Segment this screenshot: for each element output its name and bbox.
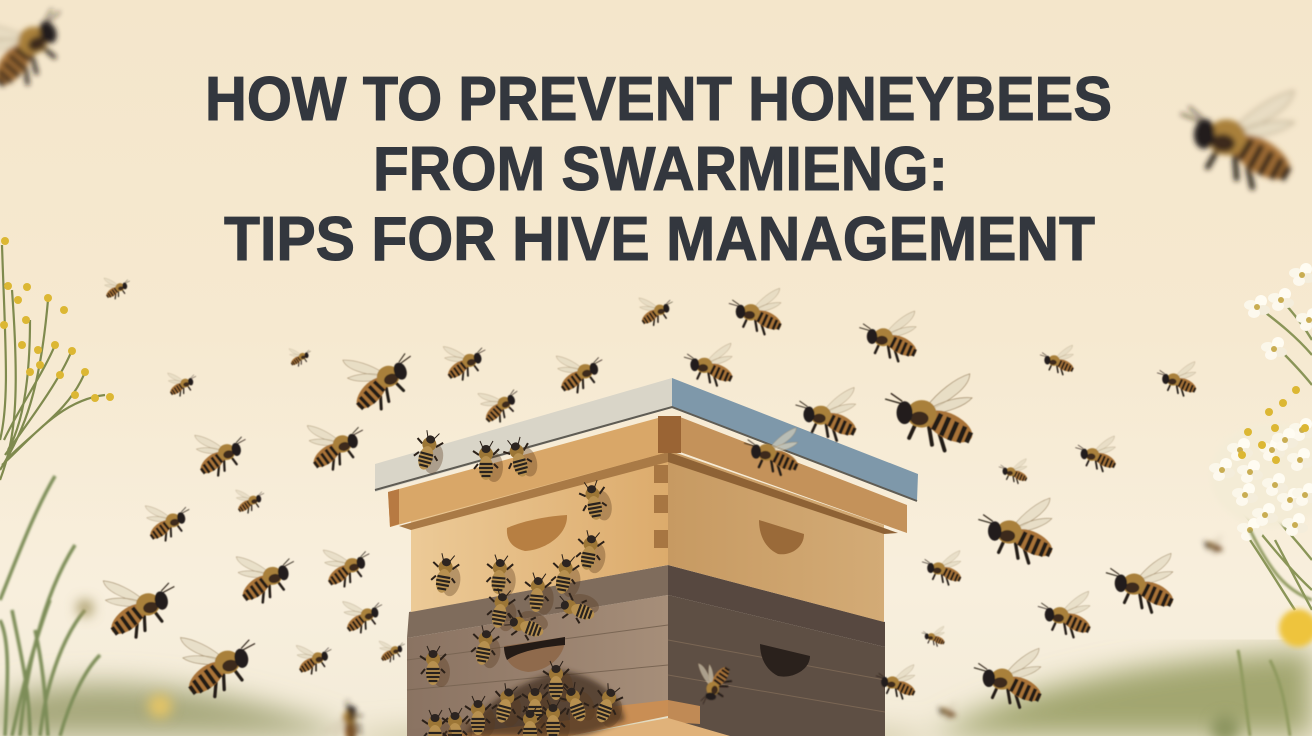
title: TIPS FOR HIVE MANAGEMENT bbox=[224, 205, 1095, 274]
title bbox=[205, 65, 1112, 274]
meadow ground bbox=[0, 650, 1312, 736]
title: FROM SWARMIENG: bbox=[373, 135, 948, 204]
right grass and blurred flower bbox=[1238, 530, 1312, 736]
blurred foreground meadow blooms bbox=[77, 600, 1239, 736]
hive lower box bbox=[407, 595, 885, 736]
right white flowers bbox=[1209, 263, 1312, 610]
bottom board bbox=[407, 700, 730, 736]
hive upper box bbox=[399, 450, 898, 622]
hive dark divider band bbox=[407, 565, 885, 647]
flying bees facing right bbox=[97, 274, 676, 702]
lower right handhold bbox=[760, 644, 810, 677]
lower left handhold bbox=[504, 637, 565, 672]
hive roof bbox=[375, 378, 918, 501]
title: HOW TO PREVENT HONEYBEES bbox=[205, 65, 1112, 134]
left grass bbox=[0, 476, 100, 736]
hive rim bbox=[388, 416, 907, 533]
flying bees facing left bbox=[684, 288, 1198, 708]
beehive bbox=[375, 378, 918, 736]
bees crawling on hive bbox=[410, 428, 629, 736]
left wildflowers bbox=[0, 237, 114, 480]
